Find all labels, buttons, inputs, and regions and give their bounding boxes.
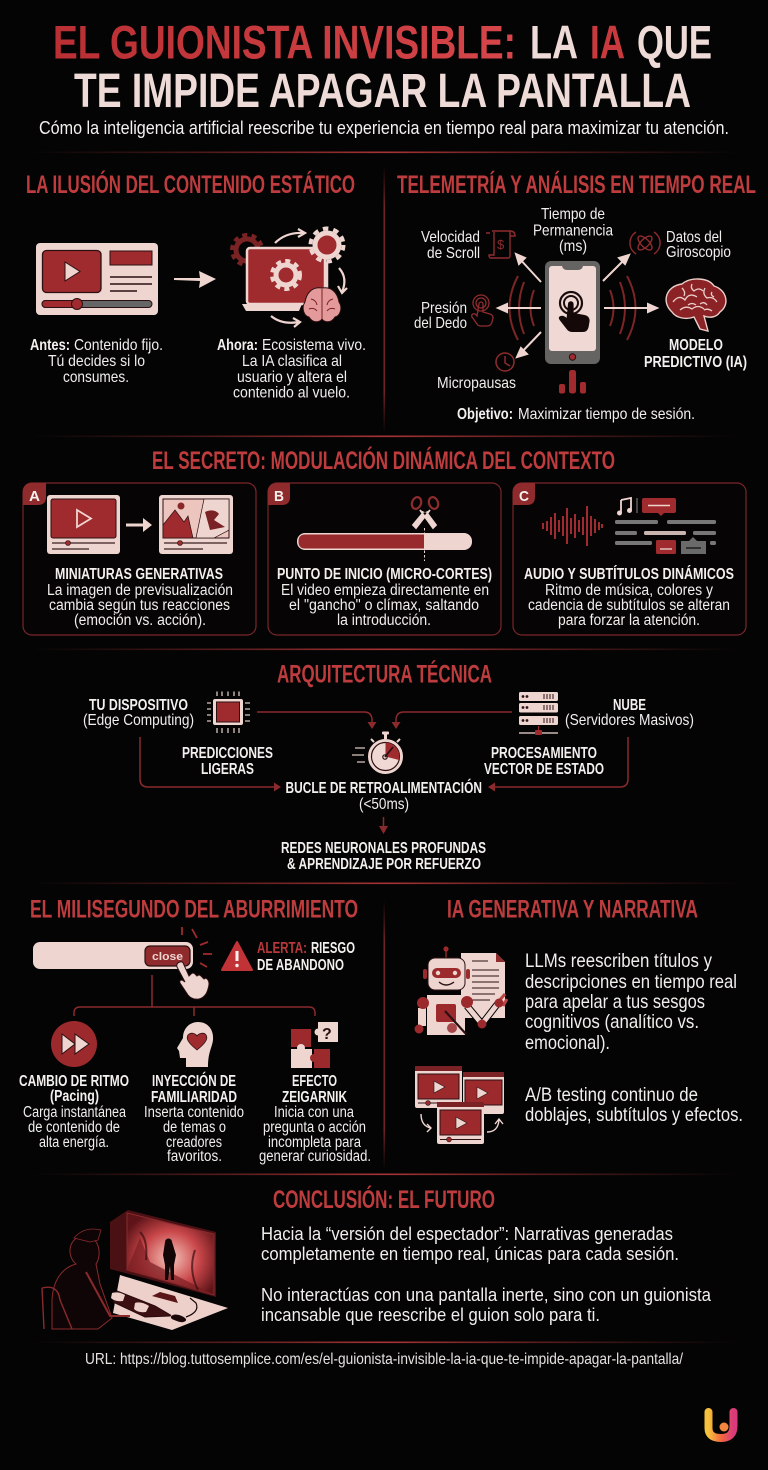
text: card B: El video empieza directamente en <box>281 582 489 599</box>
text: antes: Tú decides si lo <box>48 353 145 370</box>
text: card A: cambia según tus reacciones <box>49 597 230 614</box>
icon: gyroscope <box>630 232 660 254</box>
icon: chip <box>207 692 250 733</box>
label: redes neuronales: & APRENDIZAJE POR REFUERZO <box>287 856 481 873</box>
label: procesamiento: VECTOR DE ESTADO <box>484 761 604 778</box>
label: tu dispositivo: TU DISPOSITIVO <box>89 697 188 714</box>
icon: scroll <box>486 231 515 258</box>
label: predicciones ligeras: PREDICCIONES <box>182 745 273 762</box>
text: inyección de familiaridad: favoritos. <box>167 1148 222 1165</box>
heading: ilusión: LA ILUSIÓN DEL CONTENIDO ESTÁTICO <box>26 169 355 199</box>
text: cambio de ritmo: (Pacing) <box>50 1088 99 1105</box>
text: card B: PUNTO DE INICIO (MICRO-CORTES) <box>277 566 492 583</box>
label: datos del giroscopio: Datos del <box>666 229 722 246</box>
text: llms <box>525 950 737 1054</box>
arrows: telemetry flows <box>498 254 657 357</box>
label: nube <box>565 697 694 729</box>
text: efecto zeigarnik <box>259 1073 371 1165</box>
text: efecto zeigarnik: ZEIGARNIK <box>282 1089 348 1106</box>
icon: warning triangle <box>222 942 252 970</box>
icon: A/B video stack <box>415 1066 504 1144</box>
illustration: person at monitor <box>42 1210 228 1330</box>
text: antes: Contenido fijo. <box>74 337 163 354</box>
icon: clock <box>496 353 514 371</box>
label: presión del dedo: del Dedo <box>414 315 467 332</box>
panel: la ilusión del contenido estático <box>26 169 366 402</box>
label: datos del giroscopio: Giroscopio <box>666 244 731 261</box>
text: card C <box>524 566 734 629</box>
text: card B <box>277 566 492 629</box>
arrow: thumbnail change <box>126 518 152 532</box>
icon: fast forward <box>51 1021 97 1067</box>
icon: predictive brain <box>666 279 726 331</box>
label: velocidad de scroll: Velocidad <box>421 229 480 246</box>
text: ab testing <box>525 1084 743 1126</box>
label: datos del giroscopio <box>666 229 731 261</box>
icon: waveform <box>543 506 602 546</box>
label: bucle de retroalimentación <box>286 779 482 813</box>
badge B: B <box>274 488 284 505</box>
label: tu dispositivo: (Edge Computing) <box>83 712 194 729</box>
text: ahora: Ahora: <box>217 337 258 354</box>
text: cambio de ritmo <box>19 1073 129 1151</box>
text: inyección de familiaridad: INYECCIÓN DE <box>152 1072 236 1090</box>
label: redes neuronales: REDES NEURONALES PROFUNDAS <box>281 840 486 857</box>
connector tree <box>74 975 315 1016</box>
icon: subtitles and music <box>615 498 716 554</box>
icon: stopwatch <box>352 732 402 774</box>
panel: ia generativa y narrativa <box>414 896 743 1144</box>
text: antes <box>30 337 163 386</box>
text: inyección de familiaridad: FAMILIARIDAD <box>151 1089 237 1106</box>
url source: URL: https://blog.tuttosemplice.com/es/el-guionista-invisible-la-ia-que-te-impide-apagar-la-pantalla/ <box>85 1351 683 1368</box>
text: llms: LLMs reescriben títulos y <box>525 950 712 972</box>
icon: live ecosystem laptop <box>232 228 347 327</box>
text: cambio de ritmo: de contenido de <box>28 1119 120 1136</box>
label: velocidad de scroll: de Scroll <box>427 245 480 262</box>
text: antes: Antes: <box>30 337 70 354</box>
label: procesamiento: PROCESAMIENTO <box>491 745 597 762</box>
label: redes neuronales <box>281 840 486 873</box>
panel: card C audio y subtítulos <box>513 483 746 635</box>
label: tiempo de permanencia: (ms) <box>559 238 587 255</box>
badge B <box>268 483 290 505</box>
label: velocidad de scroll <box>421 229 480 262</box>
text: ahora <box>217 337 366 402</box>
label: modelo predictivo: MODELO <box>669 337 723 354</box>
badge A <box>23 483 46 505</box>
icon: generated thumbnail <box>159 495 233 554</box>
text: efecto zeigarnik: pregunta o acción <box>263 1119 366 1136</box>
label: bucle de retroalimentación: BUCLE DE RETROALIMENTACIÓN <box>286 779 482 797</box>
text: card C: Ritmo de música, colores y <box>545 582 713 599</box>
text: objetivo <box>457 406 695 423</box>
icon: servers <box>519 692 558 735</box>
icon: close bar <box>33 927 212 969</box>
label: predicciones ligeras: LIGERAS <box>201 761 254 778</box>
icon: pointing hand <box>177 962 209 999</box>
badge A: A <box>29 488 40 505</box>
text: versión del espectador: completamente en tiempo real, únicas para cada sesión. <box>261 1244 679 1264</box>
label: modelo predictivo <box>644 337 747 371</box>
text: inyección de familiaridad: creadores <box>166 1134 222 1151</box>
text: llms: emocional). <box>525 1032 610 1054</box>
text: ahora: Ecosistema vivo. <box>262 337 366 354</box>
heading: arquitectura: ARQUITECTURA TÉCNICA <box>277 660 492 688</box>
badge C <box>513 483 535 505</box>
label: tiempo de permanencia: Tiempo de <box>541 206 605 223</box>
text: ahora: usuario y altera el <box>237 369 347 386</box>
icon: logo <box>708 1412 734 1438</box>
arrowheads <box>274 722 495 834</box>
panel: card B punto de inicio <box>268 483 501 635</box>
text: llms: cognitivos (analítico vs. <box>525 1011 699 1033</box>
text: objetivo: Maximizar tiempo de sesión. <box>518 406 695 423</box>
label: tiempo de permanencia: Permanencia <box>533 222 613 240</box>
arrow: before to now <box>174 271 216 288</box>
icon: finger pressure <box>472 295 493 326</box>
text: cambio de ritmo: CAMBIO DE RITMO <box>19 1073 129 1090</box>
text: ahora: La IA clasifica al <box>242 353 342 370</box>
text: guionista incansable <box>261 1285 712 1325</box>
text: inyección de familiaridad <box>144 1072 244 1165</box>
panel: card A miniaturas generativas <box>23 483 256 635</box>
text: efecto zeigarnik: incompleta para <box>268 1134 361 1151</box>
text: alerta: ALERTA: <box>257 940 307 957</box>
label: tiempo de permanencia <box>533 206 613 255</box>
icon: scroll: $ <box>497 237 505 252</box>
icon: smartphone <box>545 261 600 364</box>
title: IA <box>590 16 625 68</box>
icon: puzzle <box>291 1022 338 1068</box>
text: efecto zeigarnik: Inicia con una <box>274 1104 354 1121</box>
icon: small bar chart <box>559 370 586 394</box>
signal arcs <box>510 276 636 340</box>
icon: close bar: close <box>152 951 183 963</box>
text: card B: el "gancho" o clímax, saltando <box>289 597 479 614</box>
badge C: C <box>519 488 529 505</box>
text: alerta: DE ABANDONO <box>257 957 344 974</box>
title: QUE <box>637 16 712 68</box>
icon: puzzle: ? <box>322 1026 332 1043</box>
text: inyección de familiaridad: Inserta contenido <box>144 1104 244 1121</box>
panel: conclusión <box>42 1184 712 1330</box>
text: efecto zeigarnik: generar curiosidad. <box>259 1148 371 1165</box>
heading: milisegundo: EL MILISEGUNDO DEL ABURRIMIENTO <box>30 896 358 924</box>
title: EL GUIONISTA INVISIBLE: <box>53 16 516 68</box>
panel: el milisegundo del aburrimiento <box>19 896 371 1165</box>
text: cambio de ritmo: alta energía. <box>39 1134 109 1151</box>
label: tu dispositivo <box>83 697 194 729</box>
text: versión del espectador: Hacia la “versión del espectador”: Narrativas generadas <box>261 1224 673 1244</box>
text: versión del espectador <box>261 1224 679 1264</box>
text: ahora: contenido al vuelo. <box>233 384 350 402</box>
text: card C: para forzar la atención. <box>558 612 700 629</box>
text: cambio de ritmo: Carga instantánea <box>23 1104 126 1121</box>
text: llms: para apelar a tus sesgos <box>525 991 705 1013</box>
panel: telemetría <box>397 170 756 423</box>
label: bucle de retroalimentación: (<50ms) <box>359 796 409 813</box>
icon: static video card <box>36 243 158 315</box>
text: efecto zeigarnik: EFECTO <box>292 1073 337 1090</box>
label: predicciones ligeras <box>182 745 273 778</box>
connectors: device and cloud to stopwatch <box>140 712 628 827</box>
label: presión del dedo <box>414 300 467 332</box>
text: card B: la introducción. <box>337 612 431 629</box>
icon: robot writing <box>414 946 507 1035</box>
text: objetivo: Objetivo: <box>457 406 513 423</box>
text: card C: cadencia de subtítulos se alteran <box>528 597 730 614</box>
label: micropausas: Micropausas <box>437 375 516 392</box>
label: modelo predictivo: PREDICTIVO (IA) <box>644 354 747 371</box>
label: presión del dedo: Presión <box>421 300 467 317</box>
text: inyección de familiaridad: de temas o <box>163 1119 226 1136</box>
label: nube: NUBE <box>613 697 646 714</box>
text: alerta <box>257 940 355 974</box>
icon: head with heart <box>177 1022 213 1067</box>
text: card A: La imagen de previsualización <box>47 582 233 599</box>
text: llms: descripciones en tiempo real <box>525 971 737 993</box>
text: ab testing: A/B testing continuo de <box>525 1084 698 1106</box>
text: antes: consumes. <box>63 369 129 386</box>
text: card A <box>47 566 233 629</box>
label: nube: (Servidores Masivos) <box>565 712 694 729</box>
panel: arquitectura técnica <box>83 660 694 873</box>
text: guionista incansable: No interactúas con una pantalla inerte, sino con un guionista <box>261 1285 712 1305</box>
text: card A: MINIATURAS GENERATIVAS <box>55 566 223 583</box>
icon: static thumbnail <box>47 495 120 554</box>
title <box>53 16 712 118</box>
text: alerta: RIESGO <box>311 940 355 957</box>
label: procesamiento <box>484 745 604 778</box>
heading: conclusión: CONCLUSIÓN: EL FUTURO <box>273 1184 495 1214</box>
text: guionista incansable: incansable que reescribe el guion solo para ti. <box>261 1305 600 1325</box>
text: card A: (emoción vs. acción). <box>74 612 206 629</box>
title: LA <box>530 16 578 68</box>
icon: cut timeline <box>297 496 472 561</box>
